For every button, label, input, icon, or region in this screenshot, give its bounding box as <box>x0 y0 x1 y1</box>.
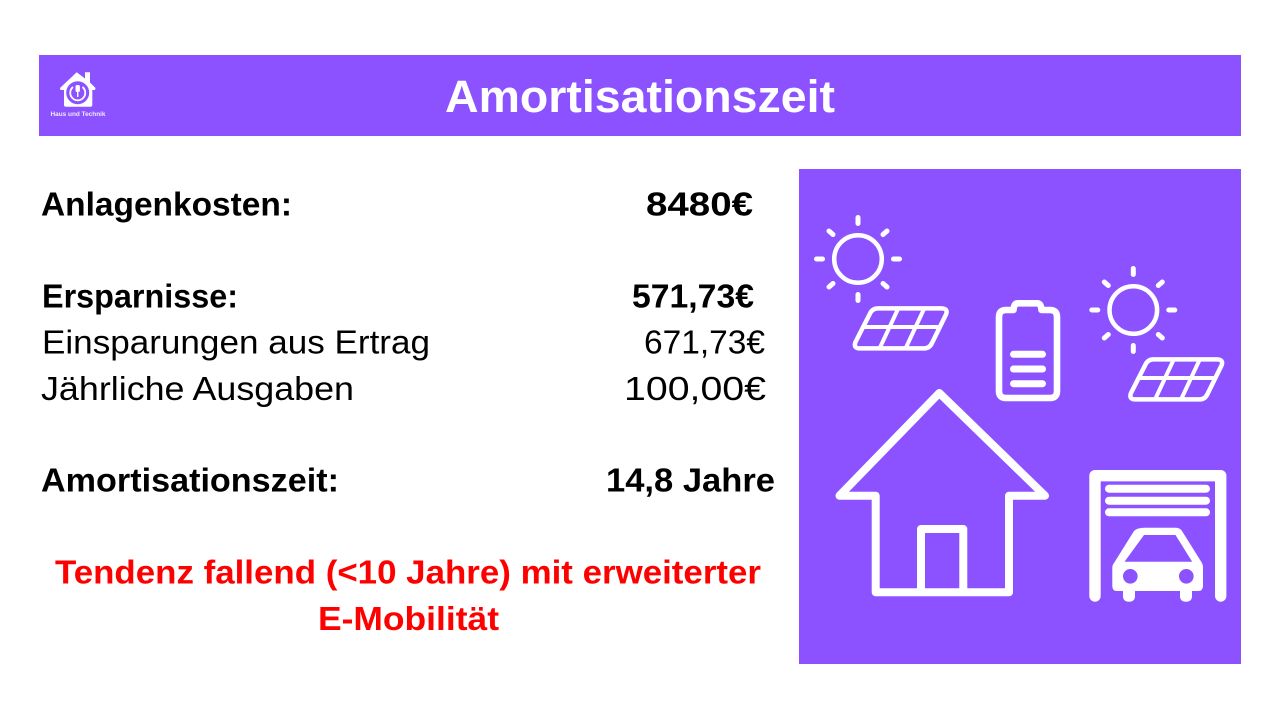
icon: solar panel left <box>855 308 947 348</box>
row: Einsparungen aus Ertrag <box>42 324 765 360</box>
row: Jährliche Ausgaben: Jährliche Ausgaben <box>41 370 354 407</box>
icon: sun left <box>816 218 900 300</box>
icon: garage with car <box>1095 476 1221 602</box>
row: Amortisationszeit <box>41 462 775 499</box>
row: Ersparnisse: 571,73€ <box>632 278 754 315</box>
icon: house <box>840 393 1045 592</box>
row: Amortisationszeit: 14,8 Jahre <box>606 462 775 499</box>
row: Ersparnisse <box>42 278 754 315</box>
icon: solar panel right <box>1130 359 1222 399</box>
row: Anlagenkosten: Anlagenkosten: <box>41 186 292 223</box>
row: Ersparnisse: Ersparnisse: <box>42 278 238 315</box>
panel: solar house illustration <box>799 169 1241 664</box>
callout: Tendenz fallend <box>55 554 761 637</box>
logo: Haus und Technik <box>50 72 106 118</box>
row: Jährliche Ausgaben <box>41 370 766 407</box>
row: Anlagenkosten: 8480€ <box>646 186 753 223</box>
row: Einsparungen aus Ertrag: Einsparungen aus Ertrag <box>42 324 430 360</box>
title: Amortisationszeit <box>445 71 835 122</box>
row: Einsparungen aus Ertrag: 671,73€ <box>644 324 765 360</box>
icon: battery <box>999 303 1057 398</box>
callout: Tendenz fallend: Tendenz fallend (<10 Jahre) mit erweiterter <box>55 554 761 590</box>
icon: sun right <box>1092 268 1175 352</box>
logo: Haus und Technik: Haus und Technik <box>50 112 106 118</box>
row: Amortisationszeit: Amortisationszeit: <box>41 462 339 499</box>
callout: Tendenz fallend: E-Mobilität <box>318 600 499 637</box>
row: Jährliche Ausgaben: 100,00€ <box>624 370 766 407</box>
row: Anlagenkosten <box>41 186 753 223</box>
header banner <box>39 55 1241 136</box>
